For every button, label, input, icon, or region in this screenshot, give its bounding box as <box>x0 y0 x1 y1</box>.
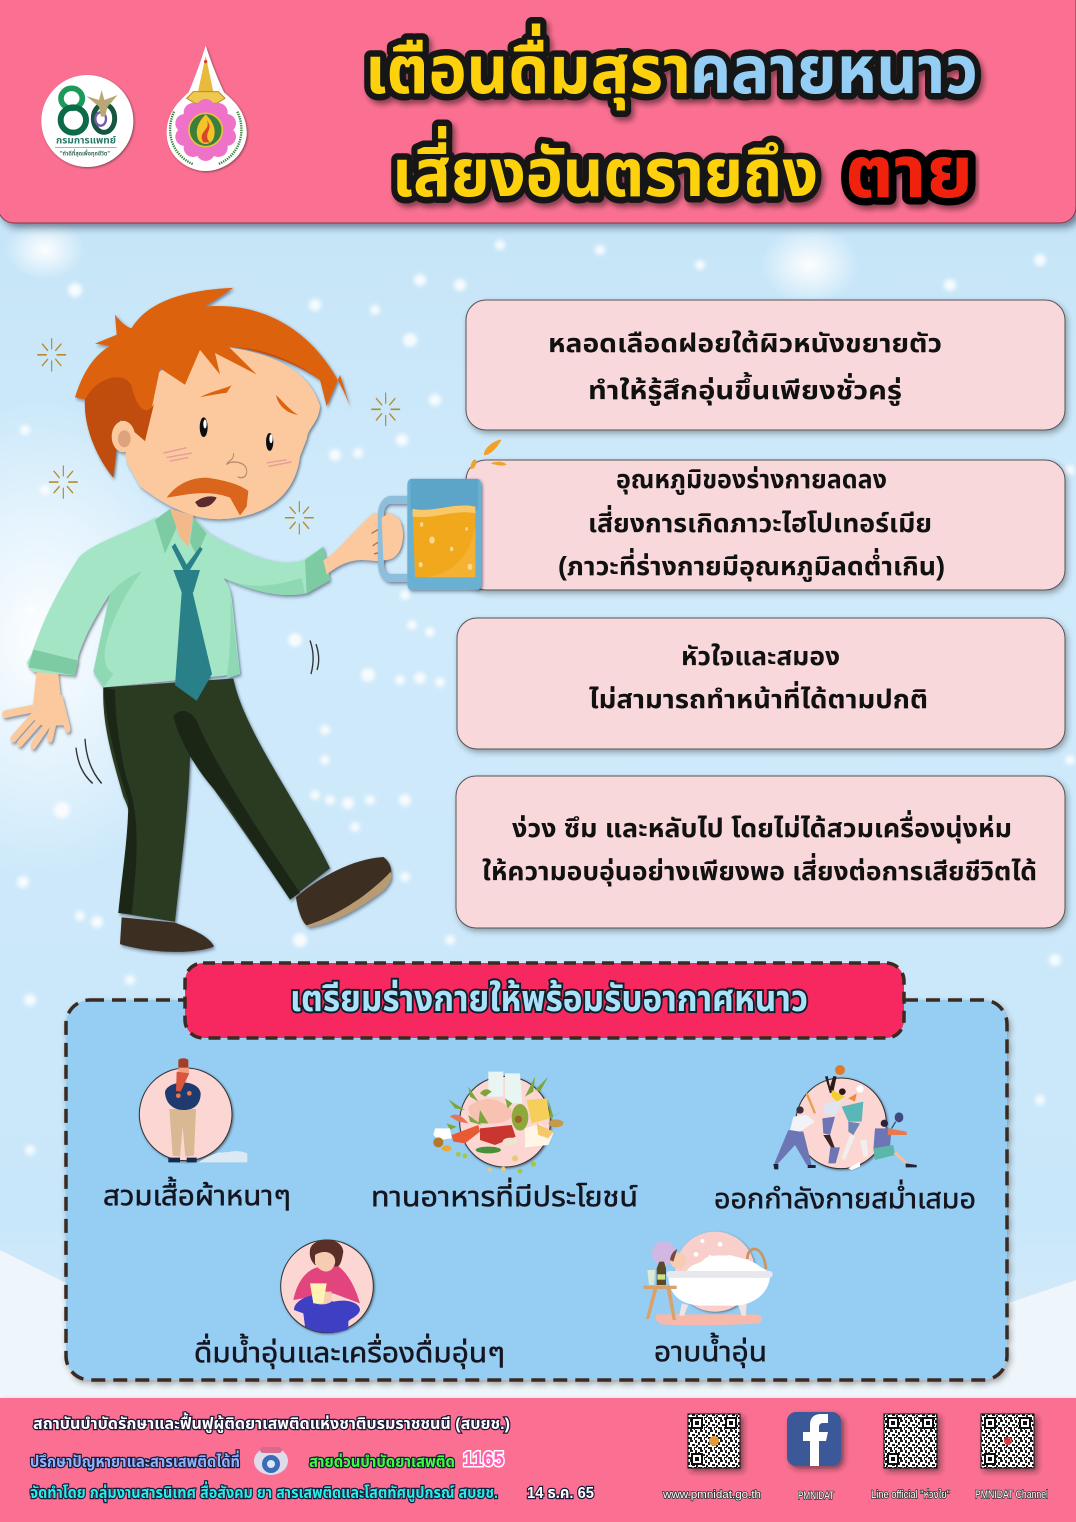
credit: จัดทำโดย กลุ่มงานสารนิเทศ สื่อสังคม ยา สารเสพติดและโสตทัศนูปกรณ์ สบยช. <box>30 1481 498 1503</box>
QR code website <box>688 1414 740 1468</box>
QR code line official <box>884 1414 937 1468</box>
face <box>125 347 320 519</box>
info card 4: ให้ความอบอุ่นอย่างเพียงพอ เสี่ยงต่อการเสียชีวิตได้ <box>482 853 1037 887</box>
hair <box>75 288 350 478</box>
logo: 80 years department of medical services <box>41 75 133 167</box>
front shoe <box>296 857 391 925</box>
facebook icon <box>787 1412 841 1466</box>
info card 2: อุณหภูมิของร่างกายลดลง <box>616 464 887 495</box>
beer mug <box>381 479 481 590</box>
info card 2 <box>466 460 1065 590</box>
ear <box>112 421 135 452</box>
title line 2 yellow: เสี่ยงอันตรายถึง <box>392 126 818 211</box>
icon: warm bath <box>643 1232 773 1325</box>
info card 1: ทำให้รู้สึกอุ่นขึ้นเพียงชั่วครู่ <box>588 372 902 406</box>
info card 3: หัวใจและสมอง <box>681 641 840 671</box>
eyes <box>200 417 208 437</box>
dizzy sparkles <box>38 339 400 534</box>
title line 1 yellow: เตือนดื่มสุรา <box>365 23 691 111</box>
caption channel: PMNIDAT Channel <box>975 1489 1048 1501</box>
label: ทานอาหารที่มีประโยชน์ <box>371 1177 638 1212</box>
caption line: Line official "ห่วงใย" <box>871 1488 950 1501</box>
section heading banner: เตรียมร่างกายให้พร้อมรับอากาศหนาว <box>290 978 808 1019</box>
label: สวมเสื้อผ้าหนาๆ <box>103 1176 291 1211</box>
info card 3 <box>457 618 1065 749</box>
logo: 80 years department of medical services: "ทำดีที่สุดเพื่อทุกชีวิต" <box>60 149 110 158</box>
icon: warm drink person <box>281 1240 373 1333</box>
title line 2 red: ตาย <box>845 133 973 213</box>
moustache <box>167 478 248 516</box>
info card 1: หลอดเลือดฝอยใต้ผิวหนังขยายตัว <box>548 328 942 358</box>
cheeks and nose <box>163 448 292 478</box>
caption facebook: PMNIDAT <box>798 1490 834 1502</box>
date: 14 ธ.ค. 65 <box>527 1485 594 1502</box>
info card 2: (ภาวะที่ร่างกายมีอุณหภูมิลดต่ำเกิน) <box>558 548 945 582</box>
logo: 80 years department of medical services: กรมการแพทย์ <box>56 136 116 147</box>
neck <box>170 509 193 547</box>
hotline number: 1165 <box>463 1448 504 1471</box>
section heading banner <box>185 963 904 1038</box>
consultation text: ปรึกษาปัญหายาและสารเสพติดได้ที่ <box>30 1450 240 1471</box>
info card 4: ง่วง ซึม และหลับไป โดยไม่ได้สวมเครื่องนุ่งห่ม <box>512 810 1012 844</box>
trousers <box>103 678 330 922</box>
right forearm and fist <box>323 513 403 574</box>
icon: warm clothes person <box>139 1058 247 1162</box>
beer splash <box>470 440 507 469</box>
title line 1 blue: คลายหนาว <box>690 33 978 108</box>
institute name: สถาบันบำบัดรักษาและฟื้นฟูผู้ติดยาเสพติดแห่งชาติบรมราชชนนี (สบยช.) <box>33 1412 510 1434</box>
panel background <box>66 1000 1007 1380</box>
icon: telephone <box>254 1447 288 1475</box>
eyebrows <box>200 385 298 415</box>
wobble lines <box>76 641 319 783</box>
info card 1 <box>466 300 1065 430</box>
footer <box>0 1398 1076 1522</box>
logo: PMNIDAT lotus crest <box>167 46 247 171</box>
fist fingers over handle <box>382 515 403 560</box>
label: ดื่มน้ำอุ่นและเครื่องดื่มอุ่นๆ <box>194 1333 505 1369</box>
hotline label: สายด่วนบำบัดยาเสพติด <box>309 1453 455 1471</box>
header banner <box>0 0 1076 223</box>
rear shoe <box>120 917 214 952</box>
mouth <box>195 496 217 507</box>
section: prepare for cold weather <box>66 963 1007 1380</box>
QR code channel <box>981 1414 1034 1468</box>
info card 3: ไม่สามารถทำหน้าที่ได้ตามปกติ <box>589 681 928 714</box>
left hand <box>5 672 68 745</box>
icon: healthy food <box>433 1072 563 1173</box>
caption website: www.pmnidat.go.th <box>662 1489 761 1501</box>
label: อาบน้ำอุ่น <box>654 1332 767 1368</box>
label: ออกกำลังกายสม่ำเสมอ <box>714 1179 976 1214</box>
shirt <box>27 518 330 687</box>
illustration: drunk man holding beer mug <box>5 288 507 952</box>
icon: exercise <box>773 1065 917 1170</box>
info card 2: เสี่ยงการเกิดภาวะไฮโปเทอร์เมีย <box>588 505 932 538</box>
necktie <box>172 543 212 701</box>
info card 4 <box>456 776 1065 928</box>
